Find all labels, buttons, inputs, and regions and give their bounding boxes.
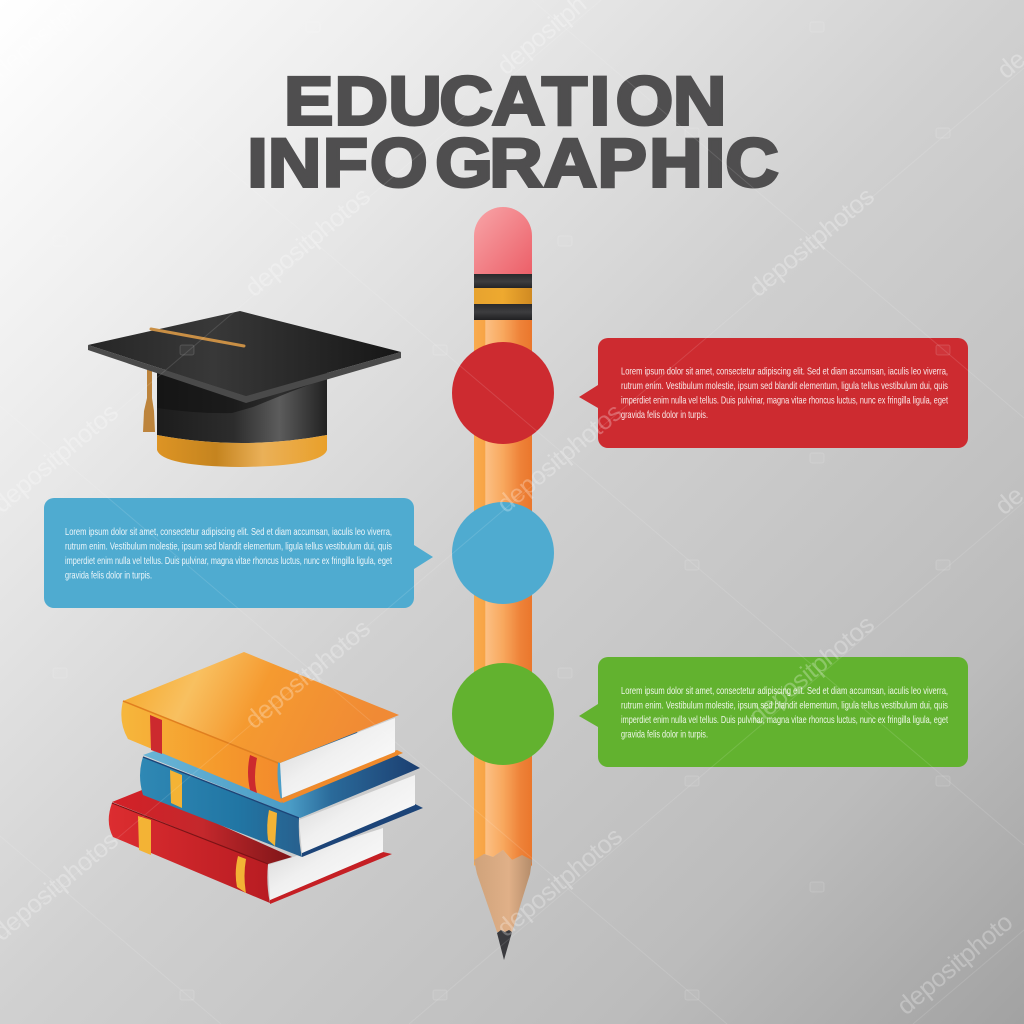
callout: blue: gravida felis dolor in turpis. xyxy=(65,570,152,582)
icon: stack of books xyxy=(109,652,423,904)
watermark pattern: depositphoto xyxy=(892,908,1018,1021)
watermark pattern: depositphotos xyxy=(744,610,880,731)
pencil eraser xyxy=(474,207,532,275)
pencil wood tip xyxy=(474,850,532,932)
watermark pattern: depositphotos xyxy=(744,182,880,303)
title: EDUCATION xyxy=(284,63,726,140)
callout: red: gravida felis dolor in turpis. xyxy=(621,409,708,421)
pencil lead xyxy=(497,930,512,960)
blue node xyxy=(452,502,554,604)
callout: red xyxy=(579,338,968,448)
red node xyxy=(452,342,554,444)
cap band xyxy=(157,435,327,467)
watermark pattern: depositphotos xyxy=(240,182,376,303)
title xyxy=(247,63,779,202)
callout: blue: Lorem ipsum dolor sit amet, consectetur adipiscing elit. Sed et diam accumsan, iaculis leo viverra, xyxy=(65,526,392,538)
title: INFOGRAPHIC xyxy=(247,125,779,202)
callout: blue: imperdiet enim nulla vel tellus. Duis pulvinar, magna vitae rhoncus luctus, nunc ex fringilla ligula, eget xyxy=(65,555,392,567)
watermark pattern: depositphotos xyxy=(492,822,628,943)
cap board edge xyxy=(88,345,401,403)
cap cord xyxy=(151,329,244,346)
green node xyxy=(452,663,554,765)
cap body xyxy=(157,370,327,443)
watermark pattern: depositphotos xyxy=(240,614,376,735)
callout: blue: rutrum enim. Vestibulum molestie, ipsum sed blandit elementum, ligula tellus vestibulum dui, quis xyxy=(65,540,392,552)
cap board xyxy=(88,311,401,396)
cap tassel xyxy=(143,368,155,432)
callout: green: gravida felis dolor in turpis. xyxy=(621,728,708,740)
pencil ferrule xyxy=(474,274,532,320)
watermark pattern: depositphotos xyxy=(492,398,628,519)
orange book xyxy=(121,652,403,803)
blue book xyxy=(140,700,423,857)
pencil body xyxy=(474,318,532,866)
pencil xyxy=(474,207,532,960)
callout: blue xyxy=(44,498,433,608)
icon: graduation cap xyxy=(88,311,401,467)
callout: green xyxy=(579,657,968,767)
cap board shadow xyxy=(157,370,327,413)
red book xyxy=(109,790,392,904)
